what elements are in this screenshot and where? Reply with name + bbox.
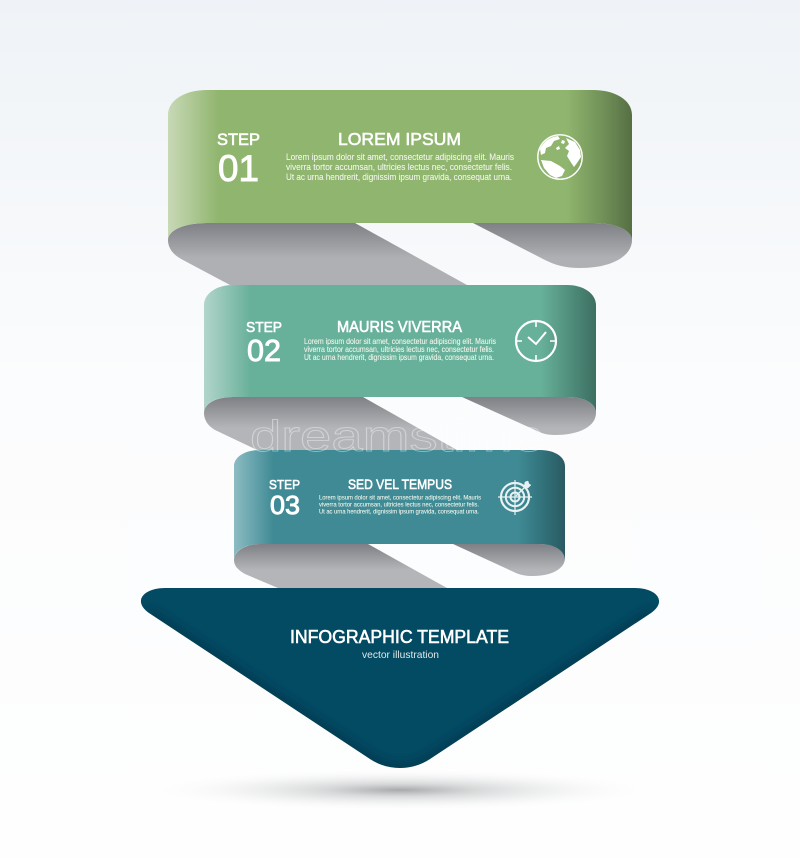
panel: step 02 — [204, 285, 596, 450]
panel: arrow — [141, 588, 659, 768]
fold shadow: step 02 left — [204, 397, 457, 450]
panel: step 03 — [234, 450, 565, 588]
body text: step 01: Ut ac urna hendrerit, dignissim ipsum gravida, consequat urna. — [286, 172, 512, 182]
step label 03: STEP — [269, 477, 300, 492]
arrow shape — [141, 588, 659, 768]
body text: step 01: Lorem ipsum dolor sit amet, consectetur adipiscing elit. Mauris — [286, 152, 514, 162]
ribbon: step 03 — [234, 450, 565, 560]
body text: step 03: Lorem ipsum dolor sit amet, consectetur adipiscing elit. Mauris — [319, 494, 482, 502]
body text: step 02: Ut ac urna hendrerit, dignissim ipsum gravida, consequat urna. — [304, 353, 494, 362]
body text: step 01 — [286, 152, 514, 182]
heading: mauris viverra: MAURIS VIVERRA — [337, 319, 463, 336]
body text: step 02: viverra tortor accumsan, ultricies lectus nec, consectetur felis. — [304, 345, 494, 354]
step label 02: 02 — [247, 333, 281, 368]
fold shadow: step 01 left — [168, 223, 467, 285]
body text: step 03 — [319, 494, 482, 516]
step label 03 — [269, 477, 300, 520]
icon: globe — [538, 135, 582, 179]
step label 02: STEP — [246, 320, 282, 336]
body text: step 02 — [304, 337, 496, 362]
body text: step 01: viverra tortor accumsan, ultricies lectus nec, consectetur felis. — [286, 162, 512, 172]
step label 02 — [246, 320, 282, 368]
watermark — [250, 402, 544, 461]
step label 01: STEP — [217, 131, 260, 149]
step label 01: 01 — [218, 148, 259, 189]
fold shadow: step 03 right — [453, 544, 565, 576]
arrow heading: INFOGRAPHIC TEMPLATE — [290, 627, 509, 647]
fold shadow: step 01 right — [473, 223, 632, 268]
ribbon: step 02 — [204, 285, 596, 413]
body text: step 02: Lorem ipsum dolor sit amet, consectetur adipiscing elit. Mauris — [304, 337, 496, 346]
heading: lorem ipsum: LOREM IPSUM — [338, 129, 461, 149]
heading: sed vel tempus: SED VEL TEMPUS — [348, 477, 452, 492]
step label 03: 03 — [270, 490, 300, 520]
ribbon: step 01 — [168, 90, 632, 240]
body text: step 03: viverra tortor accumsan, ultricies lectus nec, consectetur felis. — [319, 502, 479, 508]
watermark: dreamstime — [250, 412, 544, 461]
step label 01 — [217, 131, 260, 189]
icon: clock — [516, 321, 556, 361]
icon: target — [498, 480, 532, 515]
arrow inner edge shading — [149, 613, 651, 768]
fold shadow: step 03 left — [234, 544, 447, 588]
arrow subheading: vector illustration — [362, 649, 439, 661]
panel: step 01 — [168, 90, 632, 285]
fold shadow: step 02 right — [462, 397, 596, 435]
body text: step 03: Ut ac urna hendrerit, dignissim ipsum gravida, consequat urna. — [319, 508, 479, 516]
floor shadow — [145, 769, 655, 811]
